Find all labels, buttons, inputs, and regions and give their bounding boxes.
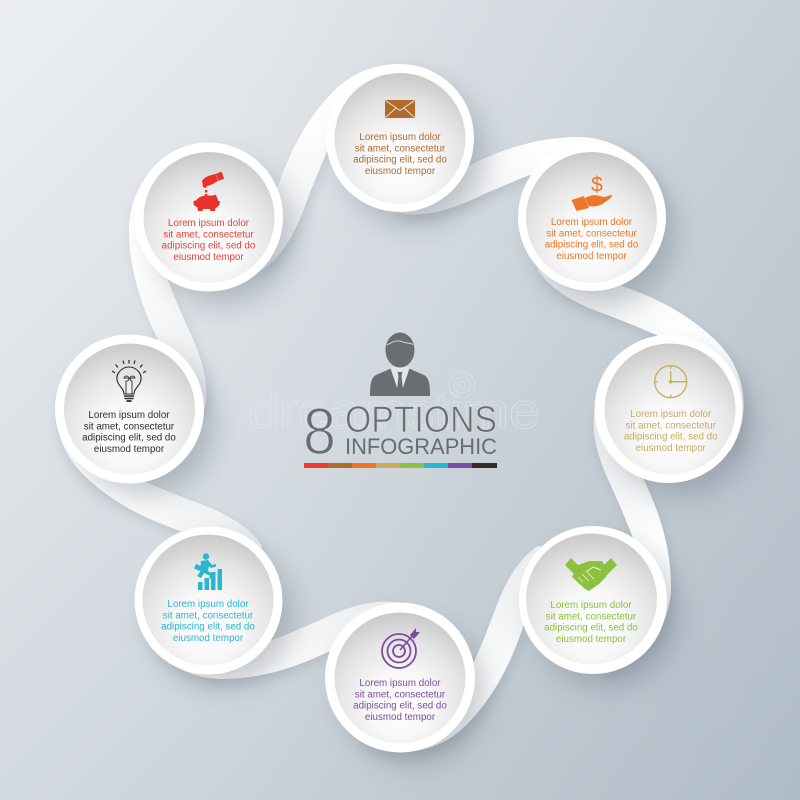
option: runner on bars xyxy=(134,526,282,674)
icon: piggy bank with coin xyxy=(194,172,224,211)
text: money in hand: Lorem ipsum dolor xyxy=(551,217,633,228)
option: piggy bank xyxy=(134,142,283,292)
title: options: OPTIONS xyxy=(345,399,497,440)
text: piggy bank: Lorem ipsum dolor xyxy=(168,218,250,229)
text: clock: eiusmod tempor xyxy=(636,443,707,454)
text: money in hand: adipiscing elit, sed do xyxy=(545,240,639,251)
option: clock xyxy=(594,335,742,483)
icon: target xyxy=(382,628,420,668)
text: envelope: sit amet, consectetur xyxy=(355,143,446,154)
option: light bulb xyxy=(55,334,204,484)
text: target: eiusmod tempor xyxy=(365,712,436,723)
text: runner on bars: sit amet, consectetur xyxy=(163,610,254,621)
text: envelope: eiusmod tempor xyxy=(365,166,436,177)
icon: handshake xyxy=(565,558,617,591)
option: target xyxy=(325,602,475,752)
text: piggy bank: sit amet, consectetur xyxy=(163,229,254,240)
icon: clock xyxy=(655,366,687,398)
option: handshake xyxy=(519,526,667,674)
text: handshake: adipiscing elit, sed do xyxy=(544,623,638,634)
title: 8: 8 xyxy=(303,394,336,468)
icon: dollar over hand: $ xyxy=(591,174,603,196)
text: target: adipiscing elit, sed do xyxy=(353,701,447,712)
text: piggy bank: adipiscing elit, sed do xyxy=(162,241,256,252)
text: clock: adipiscing elit, sed do xyxy=(624,432,718,443)
icon: runner on bars xyxy=(194,553,222,590)
text: runner on bars: adipiscing elit, sed do xyxy=(161,622,255,633)
icon: dollar over hand xyxy=(572,174,612,211)
text: piggy bank: eiusmod tempor xyxy=(173,252,244,263)
text: clock: Lorem ipsum dolor xyxy=(630,409,712,420)
icon: envelope xyxy=(385,100,415,118)
text: runner on bars: Lorem ipsum dolor xyxy=(167,599,249,610)
icon: light bulb xyxy=(112,360,146,401)
text: light bulb: sit amet, consectetur xyxy=(84,421,175,432)
option: money in hand xyxy=(518,143,666,291)
text: money in hand: sit amet, consectetur xyxy=(546,228,637,239)
text: envelope: adipiscing elit, sed do xyxy=(353,155,447,166)
text: handshake: sit amet, consectetur xyxy=(546,611,637,622)
circle shadows xyxy=(72,82,753,764)
text: light bulb: eiusmod tempor xyxy=(94,444,165,455)
central title block xyxy=(303,332,497,468)
text: handshake: Lorem ipsum dolor xyxy=(550,600,632,611)
text: clock: sit amet, consectetur xyxy=(626,420,717,431)
title: infographic: INFOGRAPHIC xyxy=(345,434,497,459)
icon: businessman xyxy=(370,332,430,396)
text: envelope: Lorem ipsum dolor xyxy=(359,132,441,143)
text: target: Lorem ipsum dolor xyxy=(359,678,441,689)
text: light bulb: Lorem ipsum dolor xyxy=(88,410,170,421)
watermark: dreamstime xyxy=(248,383,540,439)
text: light bulb: adipiscing elit, sed do xyxy=(82,433,176,444)
text: money in hand: eiusmod tempor xyxy=(556,251,627,262)
text: target: sit amet, consectetur xyxy=(355,689,446,700)
text: runner on bars: eiusmod tempor xyxy=(173,633,244,644)
colour bar xyxy=(304,463,497,468)
option: envelope xyxy=(326,64,474,212)
text: handshake: eiusmod tempor xyxy=(556,634,627,645)
